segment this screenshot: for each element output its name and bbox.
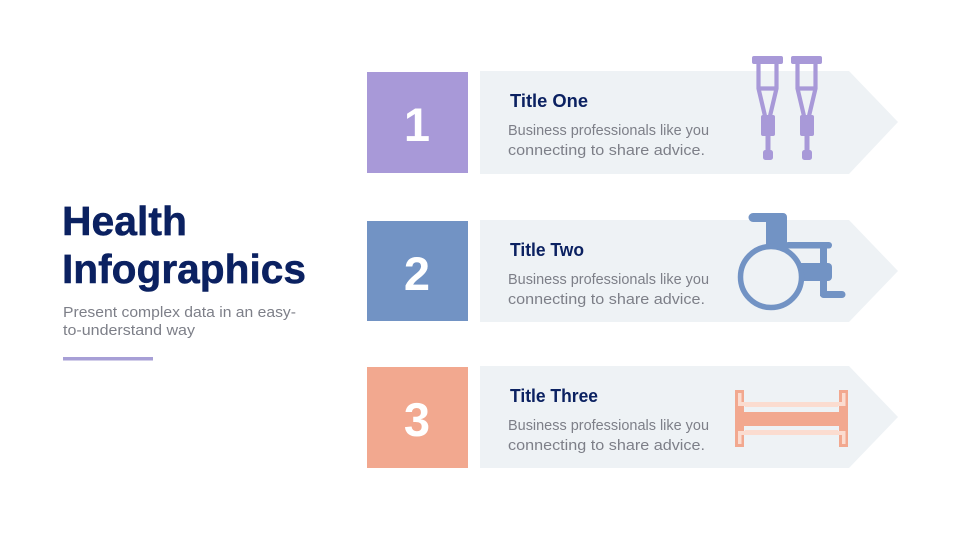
icon: wheelchair <box>740 213 846 308</box>
title: Infographics <box>62 246 306 292</box>
panel: item three <box>367 366 898 468</box>
arrow banner 1 <box>480 71 898 174</box>
body text 1 <box>508 122 709 159</box>
number tile 1 <box>367 72 468 173</box>
panel: item two <box>367 213 898 322</box>
body text 3: connecting to share advice. <box>508 437 705 454</box>
subtitle text: Present complex data in an easy- <box>63 304 296 321</box>
subtitle text <box>63 304 296 339</box>
accent underline <box>63 357 153 360</box>
arrow banner 2 <box>480 220 898 322</box>
number tile 2: 2 <box>404 247 430 300</box>
subtitle text: to-understand way <box>63 322 196 339</box>
title: Health <box>62 198 187 244</box>
number tile 3: 3 <box>404 393 430 446</box>
panel: item one <box>367 56 898 174</box>
number tile 1: 1 <box>404 98 430 151</box>
title <box>62 198 306 292</box>
number tile 3 <box>367 367 468 468</box>
body text 3 <box>508 417 709 454</box>
body text 2 <box>508 271 709 308</box>
body text 3: Business professionals like you <box>508 417 709 434</box>
body text 2: Business professionals like you <box>508 271 709 288</box>
heading: Title Two: Title Two <box>510 240 584 260</box>
left intro panel <box>62 198 306 360</box>
heading: Title One: Title One <box>510 91 588 111</box>
number tile 2 <box>367 221 468 321</box>
body text 1: Business professionals like you <box>508 122 709 139</box>
arrow banner 3 <box>480 366 898 468</box>
icon: crutches <box>752 56 822 160</box>
body text 1: connecting to share advice. <box>508 142 705 159</box>
heading: Title Three: Title Three <box>510 386 598 406</box>
body text 2: connecting to share advice. <box>508 291 705 308</box>
icon: hospital bed <box>735 390 848 447</box>
